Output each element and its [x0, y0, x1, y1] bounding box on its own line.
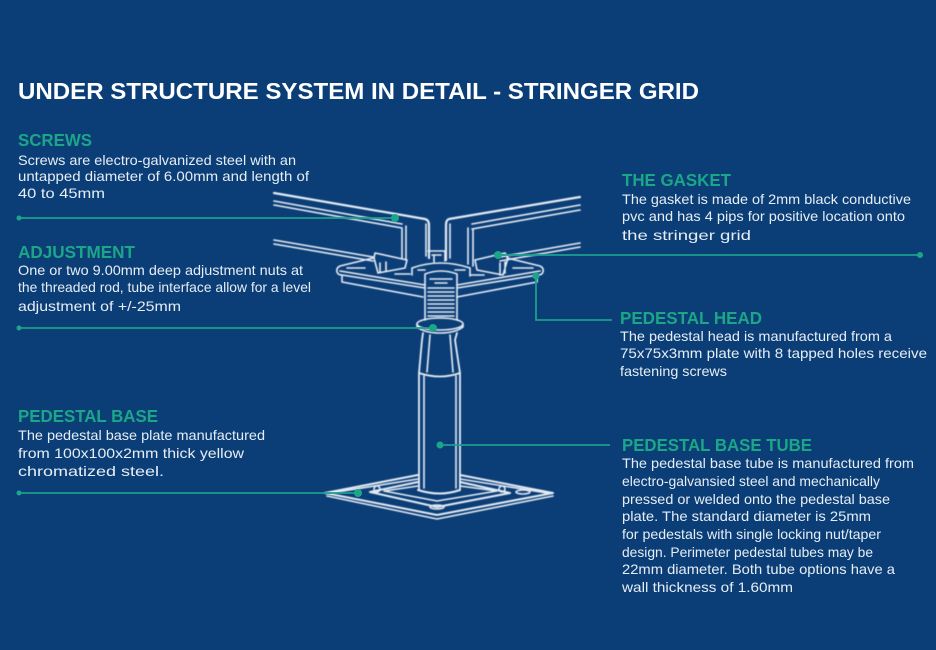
callout: adjustment: ADJUSTMENT	[18, 242, 135, 262]
callout: pedestal base: PEDESTAL BASE	[18, 406, 158, 426]
callout: pedestal base: from 100x100x2mm thick yellow	[18, 446, 244, 461]
callout: adjustment	[16, 242, 437, 332]
callout: pedestal base	[16, 406, 362, 497]
callout: screws: SCREWS	[18, 130, 92, 150]
callout: adjustment: adjustment of +/-25mm	[18, 299, 181, 314]
callout: the gasket: The gasket is made of 2mm black conductive	[622, 192, 911, 207]
callout: pedestal base tube	[436, 435, 914, 595]
title: UNDER STRUCTURE SYSTEM IN DETAIL - STRINGER GRID	[18, 78, 699, 104]
callout: the gasket	[494, 170, 923, 259]
callout: pedestal head: 75x75x3mm plate with 8 tapped holes receive	[620, 346, 927, 361]
base plate	[325, 475, 553, 519]
callout: screws: untapped diameter of 6.00mm and length of	[18, 169, 309, 184]
pedestal head plate	[337, 251, 543, 297]
callout: the gasket: pvc and has 4 pips for positive location onto	[622, 209, 905, 224]
callout: pedestal base tube: design. Perimeter pedestal tubes may be	[622, 545, 873, 560]
callout: pedestal base tube: pressed or welded onto the pedestal base	[622, 492, 890, 507]
callout: adjustment: the threaded rod, tube interface allow for a level	[18, 280, 311, 295]
callout: pedestal head: fastening screws	[620, 364, 727, 379]
callout: pedestal base: chromatized steel.	[18, 464, 164, 479]
callout: pedestal base tube: The pedestal base tube is manufactured from	[622, 456, 914, 471]
pedestal tube	[419, 333, 460, 490]
callout: the gasket: the stringer grid	[622, 228, 751, 243]
callout: pedestal base tube: for pedestals with single locking nut/taper	[622, 527, 881, 542]
callout: pedestal base tube: 22mm diameter. Both tube options have a	[622, 562, 895, 577]
pedestal illustration	[274, 193, 580, 519]
callout: pedestal head: The pedestal head is manufactured from a	[620, 329, 892, 344]
callout: pedestal base: The pedestal base plate manufactured	[18, 428, 265, 443]
callout: pedestal base tube: plate. The standard diameter is 25mm	[622, 509, 871, 524]
callout: adjustment: One or two 9.00mm deep adjustment nuts at	[18, 263, 303, 278]
threaded rod	[425, 271, 457, 320]
callout: pedestal base tube: PEDESTAL BASE TUBE	[622, 435, 812, 455]
callout: pedestal head: PEDESTAL HEAD	[620, 308, 762, 328]
callout: pedestal base tube: electro-galvansied steel and mechanically	[622, 474, 880, 489]
stringer beams	[274, 193, 580, 266]
callout: screws: Screws are electro-galvanized steel with an	[18, 153, 296, 168]
callout: the gasket: THE GASKET	[622, 170, 731, 190]
adjustment nut	[417, 318, 463, 333]
callout: pedestal head	[532, 272, 927, 379]
callout: pedestal base tube: wall thickness of 1.60mm	[621, 580, 793, 595]
callout: screws	[16, 130, 399, 222]
callout: screws: 40 to 45mm	[18, 186, 105, 201]
